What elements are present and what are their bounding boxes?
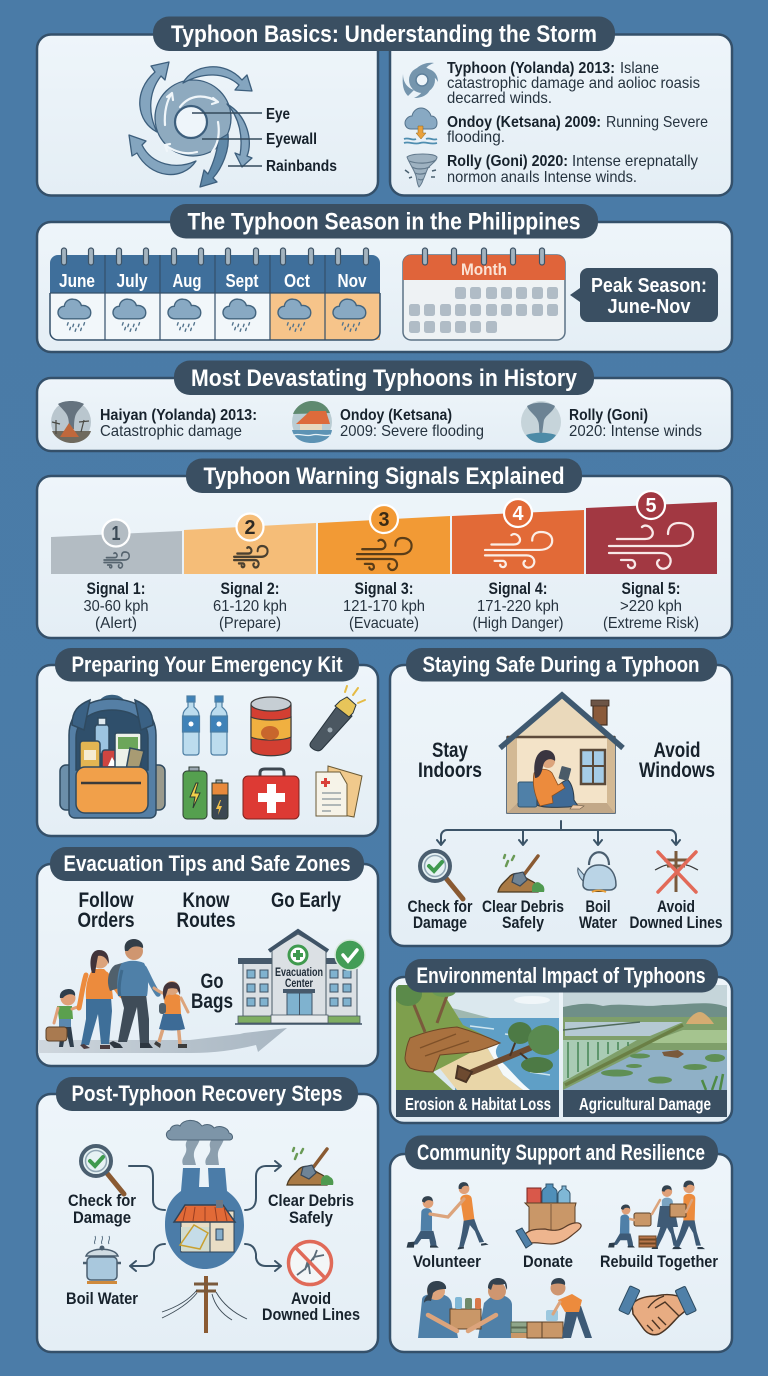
text: Rolly: Intense erepnatally [572,153,698,170]
heading: typhoon season: The Typhoon Season in the Philippines [188,208,580,236]
signal 2: (Prepare) [219,615,281,632]
item: boil water [578,852,617,932]
text: Haiyan [100,407,257,440]
tips text: Know [182,888,230,912]
item: volunteer: Volunteer [413,1253,482,1271]
item: check for damage [408,851,473,932]
heading: typhoon basics: Typhoon Basics: Understanding the Storm [171,21,597,48]
item: check for damage [68,1146,137,1227]
label: avoid windows: Windows [639,758,715,782]
panel: most devastating typhoons [37,378,732,451]
signal 2: 2 [244,517,256,539]
heading: environmental impact [405,959,718,992]
icon: batteries [183,767,228,819]
signal 2: 61-120 kph [213,598,287,615]
item: rebuild together: Rebuild Together [600,1253,718,1271]
text: Yolanda: Islane [620,60,659,77]
month calendar strip [50,248,380,340]
heading: community support [405,1136,718,1170]
signal 5: (Extreme Risk) [603,615,699,632]
item: donate [516,1184,581,1271]
label: stay indoors: Stay [432,738,468,762]
tips text: Follow [78,888,134,912]
tips text: Go Early [271,888,341,912]
icon: spiral cyclone [403,63,438,98]
month calendar strip: Aug [172,271,202,291]
tips text: Routes [176,908,236,932]
signal 3: 121-170 kph [343,598,425,615]
cyclone labels: Eyewall [266,131,317,148]
icon: house with person [500,695,623,813]
item: check for damage: Check for [408,898,473,916]
heading: warning signals [186,458,582,493]
heading: staying safe: Staying Safe During a Typhoon [422,652,700,677]
icon: family walking [46,939,188,1049]
single month calendar: Month [461,260,507,279]
signal 4 [452,499,584,632]
item: clear debris: Safely [289,1209,334,1227]
signal 3: Signal 3: [354,580,414,598]
signal 2 [184,514,316,632]
item: Ondoy [292,401,332,443]
item: boil water: Boil Water [66,1290,139,1308]
item: clear debris [482,855,564,932]
signal 3 [318,505,450,632]
signal 4: (High Danger) [472,615,564,632]
text: Rolly [569,407,702,440]
arrows: branching connector [437,821,680,845]
heading: warning signals: Typhoon Warning Signals Explained [204,463,564,490]
label: avoid windows [639,738,715,782]
tips text: Orders [78,908,135,932]
girl [154,981,188,1048]
item: donate: Donate [523,1253,573,1271]
heading: recovery steps [56,1077,358,1111]
icon: first aid kit [243,769,299,819]
item: clear debris: Safely [502,914,545,932]
heading: evacuation tips [50,847,364,881]
item: clear debris: Clear Debris [482,898,564,916]
cyclone labels [192,106,337,175]
icon: documents [316,766,362,817]
signal 5 [586,491,717,632]
signal 1: Signal 1: [86,580,146,598]
scene: agricultural damage [563,985,727,1117]
tips text: Go [200,969,224,993]
icon: flashlight [310,686,365,751]
signal 3: 3 [378,509,390,531]
icon: water bottles [182,696,228,755]
item: clear debris [268,1148,354,1227]
item: clear debris: Clear Debris [268,1192,354,1210]
heading: staying safe [406,648,717,682]
text: Ondoy: 2009: Severe flooding [340,423,484,440]
text: Ondoy [340,407,484,440]
item: boil water [66,1236,139,1308]
signal 4: 4 [512,503,524,525]
panel: evacuation tips [37,864,378,1066]
signal 5: Signal 5: [622,580,680,598]
panel: emergency kit [37,665,378,836]
text: Haiyan: Haiyan (Yolanda) 2013: [100,407,257,424]
heading: emergency kit [55,648,359,682]
cyclone labels: Eye [266,106,290,123]
scene: agricultural damage: Agricultural Damage [579,1094,711,1114]
item: avoid downed lines [262,1242,360,1324]
item: check for damage: Check for [68,1192,137,1210]
boy [46,989,80,1047]
text: Yolanda: decarred winds. [447,90,552,107]
item: avoid downed lines: Avoid [657,898,695,916]
text: Rolly: Rolly (Goni) [569,407,648,424]
signal 4: 171-220 kph [477,598,559,615]
panel: typhoon season [37,222,732,352]
panel: recovery steps [37,1094,378,1352]
signal 4: Signal 4: [488,580,548,598]
icon: cyclone diagram [129,62,252,187]
icon: backpack [60,697,165,818]
arrows: recovery connectors [129,1161,281,1271]
heading: emergency kit: Preparing Your Emergency Kit [72,652,343,677]
text: Ondoy: Ondoy (Ketsana) 2009: [447,114,601,131]
month calendar strip: June [59,271,95,291]
icon: evacuation center [235,931,365,1024]
text: Rolly: Rolly (Goni) 2020: [447,153,568,170]
signal 2: Signal 2: [220,580,280,598]
panel: typhoon basics left [37,34,378,196]
icon: utility pole [162,1276,247,1333]
heading: evacuation tips: Evacuation Tips and Safe Zones [64,851,350,876]
signal 1: 1 [112,523,120,545]
text: Ondoy: Running Severe [606,114,708,131]
text: Ondoy: Ondoy (Ketsana) [340,407,452,424]
text: Yolanda [447,60,700,107]
callout: peak season: June-Nov [608,296,691,318]
signal 5: 5 [646,495,656,517]
icon: damaged house hub [165,1120,244,1269]
text: Rolly [447,153,698,186]
icon: tornado [405,154,437,187]
signal 1 [51,520,182,632]
item: boil water: Water [579,914,617,932]
heading: most devastating: Most Devastating Typhoons in History [191,365,578,392]
item: avoid downed lines: Downed Lines [262,1306,360,1324]
item: rebuild together [600,1180,718,1271]
text: Yolanda: catastrophic damage and aolioc roasis [447,75,700,92]
text: Rolly: normon anaıls Intense winds. [447,169,637,186]
man [108,939,158,1048]
item: check for damage: Damage [413,914,467,932]
callout: peak season [570,268,718,322]
icon: evacuation center: Center [285,976,313,990]
label: stay indoors: Indoors [418,758,482,782]
signal 1: (Alert) [95,615,137,632]
item: sharing supplies [418,1278,592,1338]
cyclone labels: Rainbands [266,158,337,175]
icon: flood cloud [404,108,437,144]
arrow: route to shelter [38,1028,287,1053]
signal 3: (Evacuate) [349,615,419,632]
callout: peak season: Peak Season: [591,275,707,297]
single month calendar [403,248,565,340]
month calendar strip: Sept [226,271,258,291]
text: Rolly: 2020: Intense winds [569,423,702,440]
item: Haiyan [51,401,91,443]
icon: evacuation center: Evacuation [275,965,323,979]
panel: staying safe [390,665,732,946]
month calendar strip: Oct [284,271,310,291]
tips text [78,888,341,1013]
scene: erosion [394,982,562,1117]
icon: handshake [619,1286,696,1335]
text: Haiyan: Catastrophic damage [100,423,242,440]
item: volunteer [407,1180,489,1271]
label: avoid windows: Avoid [654,738,700,762]
tips text: Bags [191,989,233,1013]
item: boil water: Boil [586,898,610,916]
panel: community support [390,1154,732,1352]
text: Ondoy [447,114,708,146]
text: Yolanda: Typhoon (Yolanda) 2013: [447,60,615,77]
panel: environmental impact [390,977,732,1123]
panel: typhoon basics right [390,34,732,196]
woman [79,950,122,1049]
item: avoid downed lines [630,851,722,932]
heading: recovery steps: Post-Typhoon Recovery Steps [72,1081,342,1106]
panel: warning signals [37,476,732,638]
item: check for damage: Damage [73,1209,131,1227]
signal 1: 30-60 kph [84,598,148,615]
signal 5: >220 kph [620,598,682,615]
label: stay indoors [418,738,482,782]
text: Ondoy: flooding. [447,129,505,146]
item: Rolly [521,401,561,443]
item: avoid downed lines: Downed Lines [630,914,722,932]
item: avoid downed lines: Avoid [291,1290,331,1308]
month calendar strip: July [116,271,148,291]
scene: erosion: Erosion & Habitat Loss [405,1094,551,1114]
month calendar strip: Nov [338,271,366,291]
icon: canned food [251,697,291,756]
